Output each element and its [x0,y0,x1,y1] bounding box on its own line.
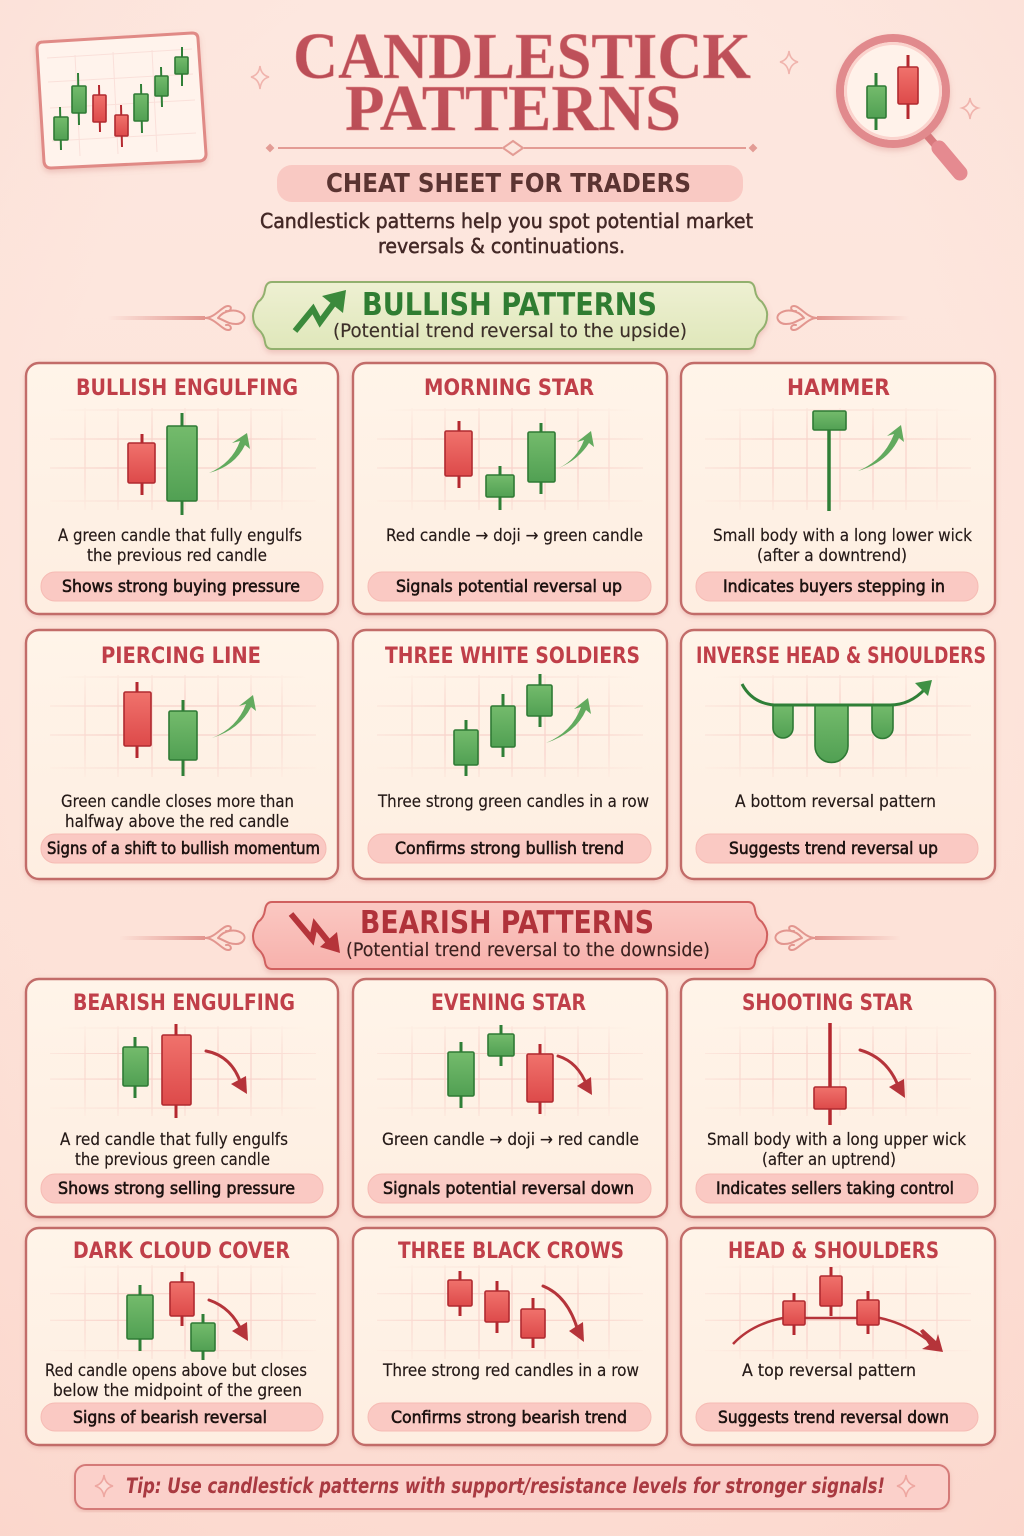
icon: bearish zigzag arrow [291,914,340,953]
chart: inverse head and shoulders [742,680,932,763]
card: head and shoulders [681,1228,995,1445]
card: bearish engulfing: the previous green candle [75,1150,270,1170]
chart: bullish engulfing candles [128,413,250,515]
chart: hammer candle [813,411,904,511]
card: hammer: (after a downtrend) [757,546,907,566]
chart: dark cloud cover candles [127,1272,248,1360]
icon: sparkle right [780,51,798,74]
chart: bearish engulfing candles [123,1024,247,1118]
card: three white soldiers: Three strong green candles in a row [377,792,649,812]
subtitle pill: cheat sheet: CHEAT SHEET FOR TRADERS [326,169,691,199]
card: dark cloud cover [26,1228,338,1445]
card: piercing line: PIERCING LINE [101,644,261,669]
card: hammer: HAMMER [787,376,890,401]
card: inverse head and shoulders: A bottom reversal pattern [735,792,936,812]
card: bullish engulfing: the previous red candle [87,546,267,566]
card: dark cloud cover: DARK CLOUD COVER [73,1239,290,1264]
icon: tilted candlestick chart card [37,33,206,168]
card: head and shoulders: A top reversal pattern [742,1361,916,1381]
ornament: bullish left [108,306,245,330]
card: shooting star: SHOOTING STAR [742,991,913,1016]
section banner: bearish patterns [253,902,767,969]
card: shooting star: Indicates sellers taking control [716,1179,954,1199]
card: hammer: Small body with a long lower wick [713,526,972,546]
card: three black crows: THREE BLACK CROWS [398,1239,624,1264]
intro text [260,209,753,258]
ornament: bearish left [119,926,245,950]
card: piercing line [26,630,338,879]
card: shooting star: (after an uptrend) [762,1150,896,1170]
intro text: reversals & continuations. [378,234,625,258]
card: dark cloud cover: Red candle opens above but closes [45,1361,307,1381]
icon: magnifying glass with candles [840,38,960,173]
section banner: bullish patterns [253,282,767,349]
card: bullish engulfing: Shows strong buying pressure [62,577,300,597]
card: morning star: Signals potential reversal up [396,577,622,597]
card: morning star: Red candle → doji → green candle [386,526,643,546]
chart: three green candles [454,674,591,776]
card: bearish engulfing: Shows strong selling pressure [58,1179,295,1199]
chart: evening star candles [448,1025,592,1114]
icon: tip sparkle right [897,1475,915,1497]
card: three white soldiers: THREE WHITE SOLDIERS [385,644,640,669]
icon: bullish zigzag arrow [295,290,346,331]
card: three black crows: Three strong red candles in a row [382,1361,639,1381]
card: head and shoulders: Suggests trend reversal down [718,1408,949,1428]
card: bullish engulfing: A green candle that fully engulfs [58,526,302,546]
card: piercing line: Signs of a shift to bullish momentum [47,839,320,859]
card: three black crows: Confirms strong bearish trend [391,1408,627,1428]
card: dark cloud cover: Signs of bearish reversal [73,1408,267,1428]
icon: tip sparkle left [95,1475,113,1497]
card: inverse head and shoulders [681,630,995,879]
card: piercing line: Green candle closes more than [61,792,294,812]
icon: sparkle left [251,66,269,89]
icon: sparkle far right [962,98,978,119]
chart: three red candles [448,1271,584,1348]
card: hammer [681,363,995,614]
card: dark cloud cover: below the midpoint of the green [53,1381,302,1401]
card: shooting star: Small body with a long upper wick [707,1130,966,1150]
ornament: bullish right [777,306,909,330]
section banner: bullish patterns: (Potential trend reversal to the upside) [333,320,687,342]
ornament: bearish right [775,926,901,950]
card: evening star: EVENING STAR [431,991,586,1016]
card: bullish engulfing: BULLISH ENGULFING [76,376,298,401]
intro text: Candlestick patterns help you spot potential market [260,209,753,233]
card: head and shoulders: HEAD & SHOULDERS [728,1239,939,1264]
title [293,20,751,145]
card: morning star [353,363,667,614]
card: evening star: Signals potential reversal down [383,1179,634,1199]
tip bar [75,1465,949,1509]
divider under title [267,141,756,155]
card: bearish engulfing: BEARISH ENGULFING [73,991,295,1016]
card: inverse head and shoulders: Suggests trend reversal up [729,839,938,859]
chart: shooting star candle [814,1023,905,1125]
card: three black crows [353,1228,667,1445]
section banner: bullish patterns: BULLISH PATTERNS [362,287,657,323]
card: three white soldiers [353,630,667,879]
card: bullish engulfing [26,363,338,614]
card: bearish engulfing: A red candle that fully engulfs [60,1130,288,1150]
chart: piercing line candles [124,682,256,776]
section banner: bearish patterns: BEARISH PATTERNS [360,905,654,941]
card: shooting star [681,979,995,1217]
card: bearish engulfing [26,979,338,1217]
title: CANDLESTICK [293,20,751,93]
card: evening star: Green candle → doji → red candle [382,1130,639,1150]
card: evening star [353,979,667,1217]
card: three white soldiers: Confirms strong bullish trend [395,839,624,859]
section banner: bearish patterns: (Potential trend reversal to the downside) [346,939,710,961]
chart: head and shoulders [733,1267,943,1352]
title: PATTERNS [345,72,681,145]
card: morning star: MORNING STAR [424,376,594,401]
card: hammer: Indicates buyers stepping in [723,577,945,597]
card: piercing line: halfway above the red candle [65,812,289,832]
chart: morning star candles [445,421,594,510]
